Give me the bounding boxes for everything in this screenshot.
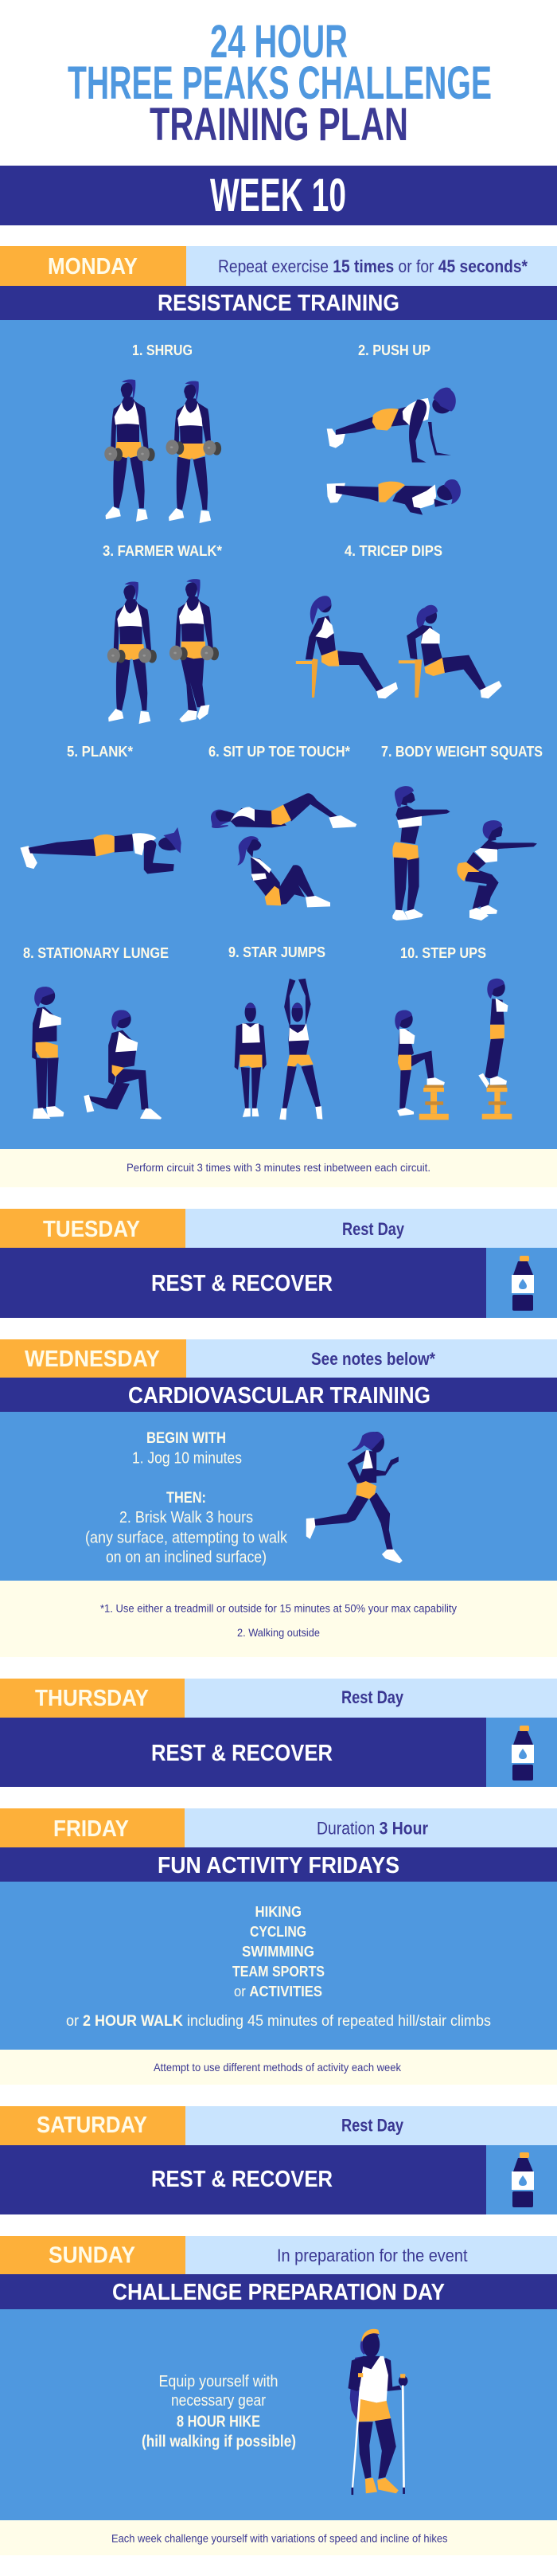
friday day row	[0, 1808, 557, 1847]
thursday day row: Rest Day	[341, 1687, 404, 1707]
figures: shrug	[104, 380, 221, 523]
activities list: CYCLING	[250, 1924, 306, 1940]
exercise labels row 3 and 4: 6. SIT UP TOE TOUCH*	[208, 744, 350, 760]
exercise labels row 3 and 4	[23, 744, 543, 961]
panel: challenge preparation	[0, 2309, 557, 2520]
note: cardio: *1. Use either a treadmill or outside for 15 minutes at 50% your max capability	[100, 1602, 457, 1615]
preparation instructions	[142, 2373, 296, 2451]
saturday day row	[0, 2106, 557, 2145]
cardio instructions: THEN:	[166, 1489, 206, 1507]
figure: hiker	[348, 2329, 407, 2495]
icon: water bottle	[512, 1256, 534, 1311]
activities list: SWIMMING	[242, 1944, 314, 1960]
monday day row: MONDAY	[48, 254, 138, 279]
note: friday	[0, 2050, 557, 2085]
tuesday day row: TUESDAY	[43, 1217, 140, 1242]
week banner	[0, 166, 557, 225]
title: TRAINING PLAN	[150, 99, 408, 150]
friday day row: Duration 3 Hour	[317, 1819, 428, 1838]
resistance training heading: RESISTANCE TRAINING	[158, 291, 399, 316]
exercise labels row 1 and 2: 4. TRICEP DIPS	[345, 543, 442, 559]
wednesday day row: See notes below*	[311, 1349, 435, 1369]
week banner: WEEK 10	[210, 170, 346, 221]
figures: tricep dips	[296, 596, 502, 698]
title	[68, 16, 492, 150]
thursday day row: THURSDAY	[35, 1686, 149, 1711]
monday day row: Repeat exercise 15 times or for 45 seconds*	[218, 256, 528, 276]
panel: cardio	[0, 1412, 557, 1581]
figure: body weight squats	[392, 786, 537, 921]
rest and recover band: tuesday	[0, 1248, 557, 1318]
exercise labels row 3 and 4: 10. STEP UPS	[400, 945, 486, 961]
rest and recover band: thursday	[0, 1718, 557, 1787]
activities list	[66, 1904, 491, 2030]
cardiovascular training heading	[0, 1378, 557, 1412]
wednesday day row: WEDNESDAY	[25, 1347, 160, 1372]
cardio instructions: 1. Jog 10 minutes	[132, 1449, 242, 1467]
sunday day row: In preparation for the event	[277, 2246, 468, 2265]
figures: push up	[327, 388, 461, 515]
activities list: HIKING	[255, 1904, 302, 1920]
saturday day row: Rest Day	[341, 2115, 404, 2136]
panel: resistance exercises	[0, 320, 557, 1149]
figure: star jumps	[235, 979, 322, 1120]
cardio instructions: (any surface, attempting to walk	[85, 1529, 288, 1546]
preparation instructions: Equip yourself with	[159, 2373, 278, 2390]
challenge preparation day heading	[0, 2274, 557, 2309]
preparation instructions: 8 HOUR HIKE	[177, 2413, 260, 2430]
note: friday: Attempt to use different methods of activity each week	[154, 2061, 402, 2074]
exercise labels row 1 and 2: 2. PUSH UP	[358, 342, 430, 358]
exercise labels row 3 and 4: 8. STATIONARY LUNGE	[23, 945, 169, 961]
figure: stationary lunge	[32, 987, 162, 1120]
note: sunday: Each week challenge yourself with variations of speed and incline of hikes	[111, 2532, 447, 2545]
exercise labels row 3 and 4: 5. PLANK*	[67, 744, 133, 760]
figure: sit up toe touch	[211, 793, 356, 907]
monday day row	[0, 246, 557, 286]
cardio instructions: 2. Brisk Walk 3 hours	[119, 1509, 253, 1526]
activities list: or 2 HOUR WALK including 45 minutes of repeated hill/stair climbs	[66, 2013, 491, 2030]
cardiovascular training heading: CARDIOVASCULAR TRAINING	[128, 1383, 430, 1409]
rest and recover band: saturday	[0, 2145, 557, 2214]
fun activity fridays heading	[0, 1847, 557, 1882]
figure: runner	[306, 1432, 403, 1563]
sunday day row	[0, 2236, 557, 2274]
cardio instructions	[85, 1429, 288, 1566]
exercise labels row 3 and 4: 7. BODY WEIGHT SQUATS	[381, 744, 543, 760]
cardio instructions: on on an inclined surface)	[106, 1549, 267, 1566]
icon: water bottle	[512, 1726, 534, 1781]
exercise labels row 1 and 2: 1. SHRUG	[132, 342, 193, 358]
cardio instructions: BEGIN WITH	[146, 1429, 226, 1447]
challenge preparation day heading: CHALLENGE PREPARATION DAY	[112, 2280, 445, 2305]
note: sunday	[0, 2520, 557, 2555]
activities list: TEAM SPORTS	[232, 1964, 325, 1980]
saturday day row: SATURDAY	[37, 2113, 147, 2138]
rest and recover band: thursday: REST & RECOVER	[151, 1741, 333, 1766]
exercise labels row 3 and 4: 9. STAR JUMPS	[228, 944, 325, 960]
thursday day row	[0, 1679, 557, 1718]
sunday day row: SUNDAY	[49, 2242, 135, 2268]
figure: step ups	[395, 979, 512, 1120]
panel: friday activities	[0, 1882, 557, 2050]
note: circuit	[0, 1149, 557, 1187]
exercise labels row 1 and 2	[103, 342, 442, 559]
rest and recover band: tuesday: REST & RECOVER	[151, 1271, 333, 1296]
exercise labels row 1 and 2: 3. FARMER WALK*	[103, 543, 222, 559]
preparation instructions: (hill walking if possible)	[142, 2433, 296, 2451]
tuesday day row: Rest Day	[342, 1219, 405, 1239]
figures: farmer walk	[107, 579, 219, 724]
title: 24 HOUR	[210, 16, 348, 68]
note: circuit: Perform circuit 3 times with 3 minutes rest inbetween each circuit.	[127, 1161, 430, 1174]
rest and recover band: saturday: REST & RECOVER	[151, 2167, 333, 2192]
friday day row: FRIDAY	[53, 1816, 129, 1842]
resistance training heading	[0, 286, 557, 320]
icon: water bottle	[512, 2152, 534, 2207]
note: cardio	[0, 1581, 557, 1657]
note: cardio: 2. Walking outside	[237, 1626, 320, 1639]
preparation instructions: necessary gear	[171, 2392, 266, 2410]
tuesday day row	[0, 1209, 557, 1248]
fun activity fridays heading: FUN ACTIVITY FRIDAYS	[158, 1853, 399, 1878]
activities list: or ACTIVITIES	[234, 1984, 322, 1999]
figure: plank	[20, 827, 181, 874]
wednesday day row	[0, 1339, 557, 1378]
